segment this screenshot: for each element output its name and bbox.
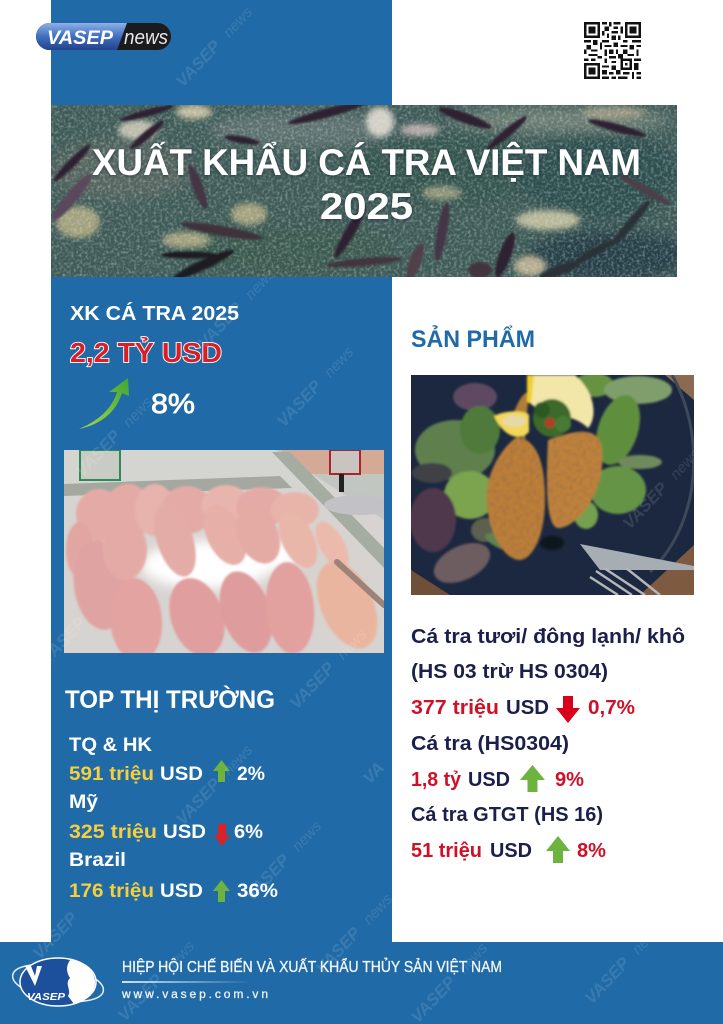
product: value added HS 16: USD: [490, 840, 532, 862]
VASEP association logo: [10, 958, 106, 1008]
footer website: www.vasep.com.vn: [121, 987, 268, 1001]
product: value added HS 16: 51 triệu: [411, 840, 482, 862]
market: United States: [69, 792, 263, 846]
banner photo: catfish in water: [48, 98, 690, 284]
banner title: [92, 141, 641, 227]
product: HS0304: 1,8 tỷ: [411, 769, 462, 791]
watermarks: news: [120, 393, 157, 431]
watermarks: news: [360, 890, 397, 928]
top markets list: [69, 735, 278, 902]
watermarks: VASEP: [619, 478, 672, 533]
product: fresh, frozen, dried: 0,7%: [588, 697, 635, 719]
footer association name: HIỆP HỘI CHẾ BIẾN VÀ XUẤT KHẨU THỦY SẢN VIỆT NAM: [122, 958, 502, 976]
product: fresh, frozen, dried: USD: [506, 697, 549, 719]
watermarks: news: [242, 265, 279, 303]
market: Brazil: 36%: [237, 881, 278, 902]
watermarks: VA: [359, 758, 388, 788]
product: fresh, frozen, dried: [411, 626, 685, 723]
watermarks: news: [162, 937, 199, 975]
watermarks: news: [629, 920, 666, 958]
product: value added HS 16: 8%: [577, 840, 606, 862]
market: Brazil: Brazil: [69, 850, 126, 871]
watermarks: news: [321, 343, 358, 381]
product: fresh, frozen, dried: (HS 03 trừ HS 0304): [411, 661, 608, 683]
watermarks: news: [220, 3, 257, 41]
watermarks: VASEP: [37, 613, 90, 668]
banner title: 2025: [320, 186, 413, 227]
banner title: XUẤT KHẨU CÁ TRA VIỆT NAM: [92, 141, 641, 183]
export value: 2,2 TỶ USD: [70, 336, 222, 368]
export heading: XK CÁ TRA 2025: [70, 302, 239, 325]
product: HS0304: USD: [468, 769, 510, 791]
product: HS0304: Cá tra (HS0304): [411, 733, 569, 755]
market: Brazil: USD: [160, 881, 203, 902]
watermarks: VASEP: [312, 923, 365, 978]
photo: pangasius fillets on ice: [64, 450, 396, 664]
product: value added HS 16: Cá tra GTGT (HS 16): [411, 804, 603, 826]
VASEP association logo: VASEP: [27, 991, 66, 1003]
footer band: [0, 942, 723, 1024]
market: China and Hong Kong: [69, 735, 265, 785]
export total block: [70, 302, 239, 429]
watermarks: news: [220, 741, 257, 779]
market: China and Hong Kong: USD: [160, 764, 203, 785]
blue column background: [51, 0, 392, 943]
watermarks: news: [334, 625, 371, 663]
product: fresh, frozen, dried: 377 triệu: [411, 697, 499, 719]
market: China and Hong Kong: 591 triệu: [69, 764, 154, 785]
watermarks: VASEP: [114, 970, 167, 1024]
VASEP news logo: [36, 23, 171, 50]
market: United States: USD: [163, 822, 206, 843]
watermarks: VASEP: [241, 850, 294, 905]
QR code: [584, 22, 641, 79]
product: fresh, frozen, dried: Cá tra tươi/ đông lạnh/ khô: [411, 626, 685, 648]
watermarks: VASEP: [29, 908, 82, 963]
watermarks: VASEP: [581, 953, 634, 1008]
watermarks: news: [455, 939, 492, 977]
market: United States: 325 triệu: [69, 822, 157, 843]
market: United States: Mỹ: [69, 792, 98, 813]
watermarks: news: [667, 445, 704, 483]
watermarks: VASEP: [172, 36, 225, 91]
market: Brazil: 176 triệu: [69, 881, 154, 902]
watermarks: VASEP: [273, 376, 326, 431]
growth percentage: 8%: [151, 388, 195, 419]
VASEP news logo: news: [124, 27, 168, 49]
photo: grilled fish fillet with salad: [410, 373, 694, 595]
watermarks: news: [289, 817, 326, 855]
watermarks: VASEP: [172, 774, 225, 829]
product list: [411, 626, 685, 863]
market: Brazil: [69, 850, 278, 902]
products heading: SẢN PHẨM: [411, 324, 535, 353]
market: China and Hong Kong: TQ & HK: [69, 735, 152, 756]
product: HS0304: 9%: [555, 769, 584, 791]
VASEP news logo: VASEP: [47, 28, 113, 49]
watermarks: VASEP: [194, 298, 247, 353]
icon: green growth arrow: [79, 378, 129, 429]
top markets heading: TOP THỊ TRƯỜNG: [65, 684, 275, 714]
market: United States: 6%: [234, 822, 263, 843]
watermarks: VASEP: [72, 426, 125, 481]
market: China and Hong Kong: 2%: [237, 764, 265, 785]
product: HS0304: [411, 733, 584, 792]
watermarks: VASEP: [286, 658, 339, 713]
product: value added HS 16: [411, 804, 606, 863]
